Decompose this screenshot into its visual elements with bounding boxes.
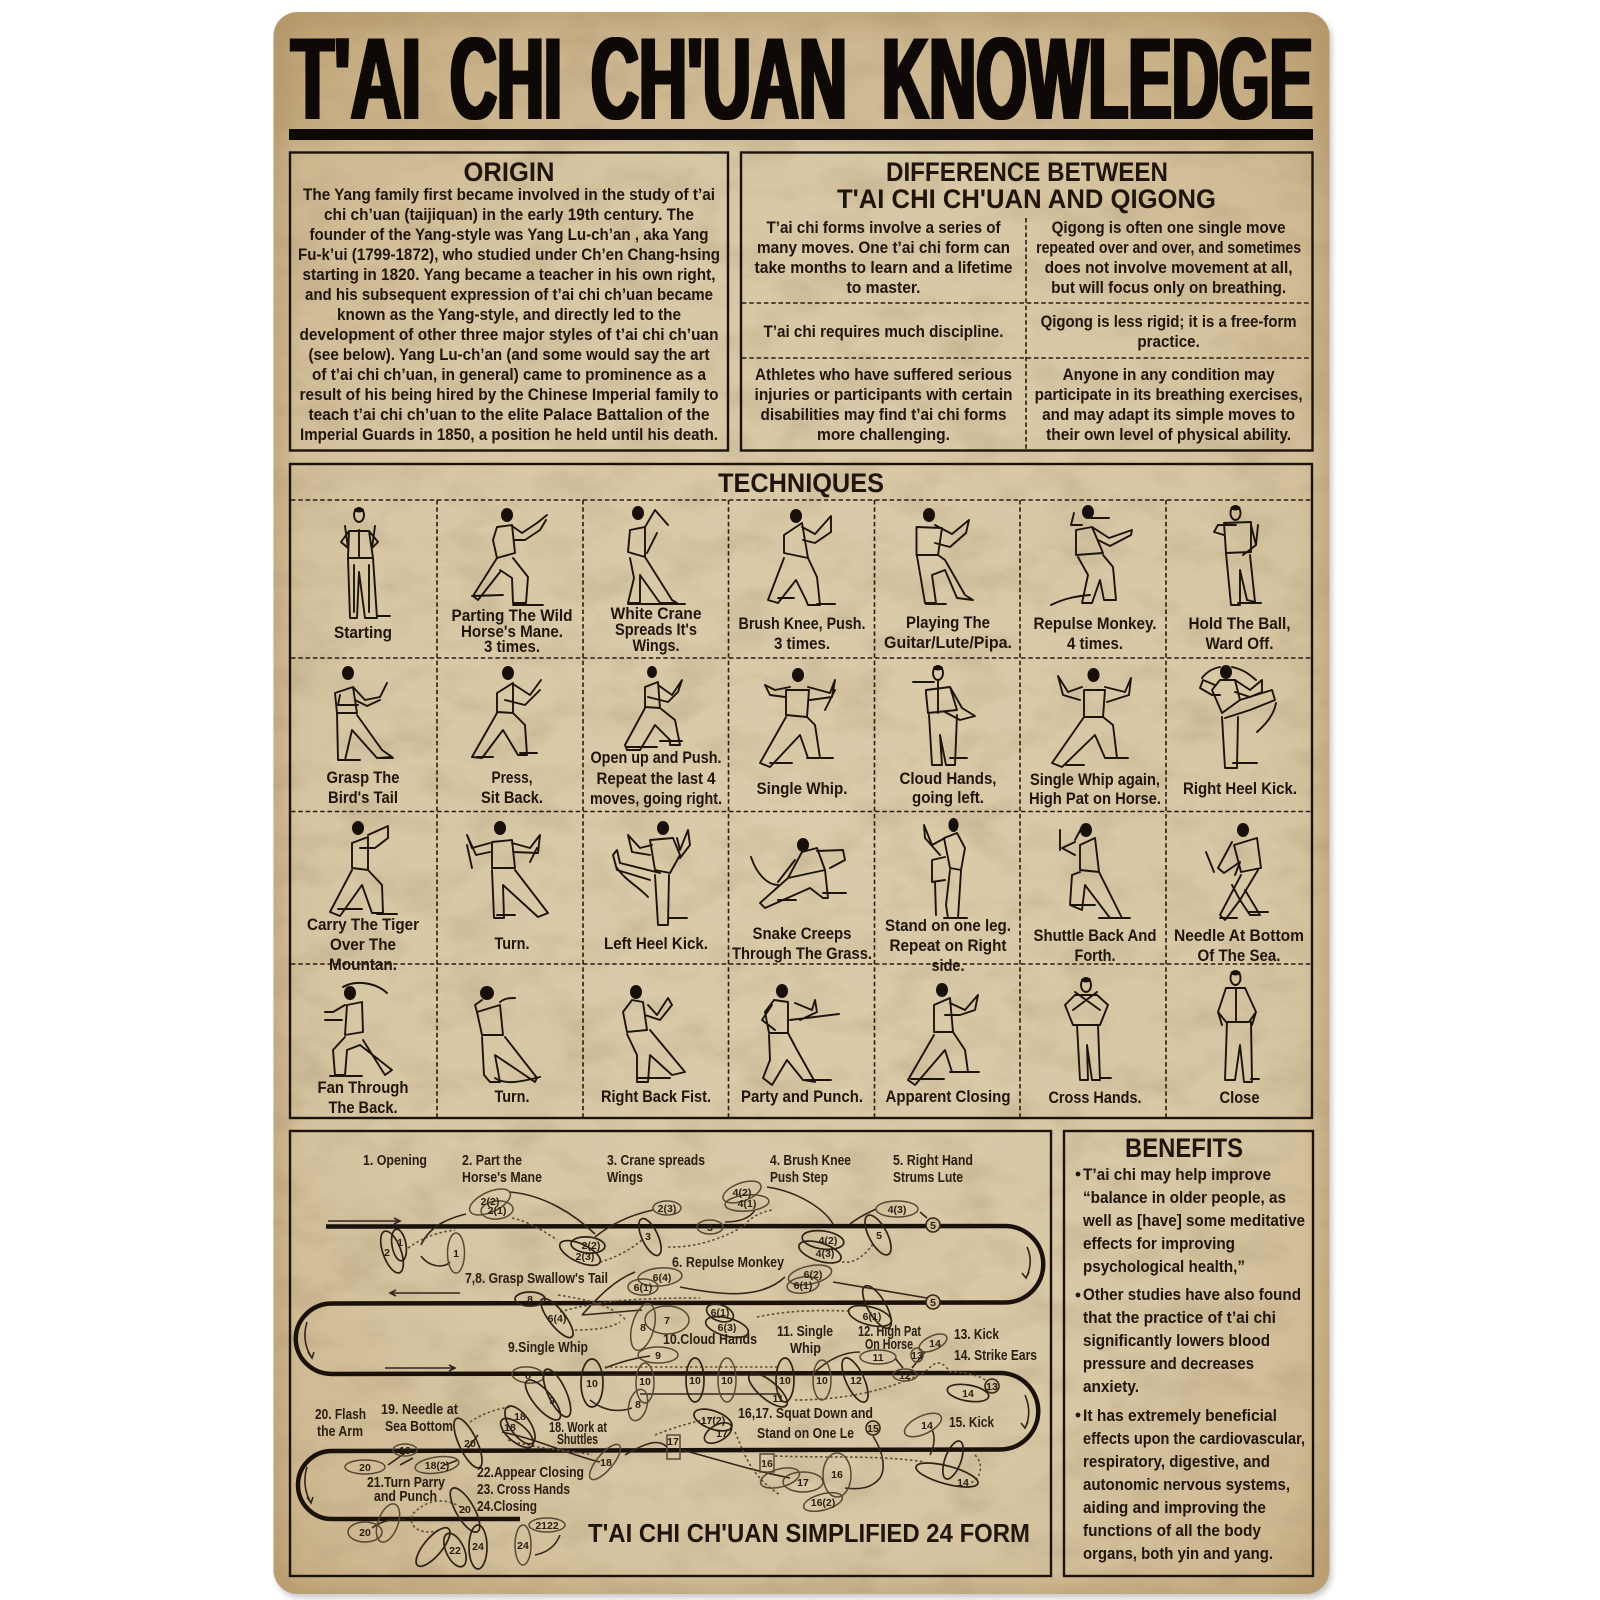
footprint step numbers: 14 (957, 1477, 969, 1489)
difference heading: DIFFERENCE BETWEEN (886, 157, 1168, 187)
footprint step numbers: 3 (645, 1231, 651, 1243)
footprint step numbers: 15 (867, 1423, 879, 1435)
footprint step numbers: 6(1) (711, 1307, 729, 1319)
footprint step numbers: 20 (464, 1438, 476, 1450)
footprint step numbers: 6(1) (863, 1311, 881, 1323)
benefit two: Other studies have also found (1083, 1285, 1301, 1304)
footprint step numbers: 4(2) (733, 1187, 751, 1199)
footwork step labels: 12. High Pat (858, 1324, 921, 1340)
comparison row 2: T’ai chi requires much discipline. (764, 322, 1004, 341)
comparison row 3 (754, 365, 1303, 444)
benefit three: It has extremely beneficial (1083, 1406, 1277, 1425)
technique: close (1218, 970, 1260, 1107)
technique: open up and push: Open up and Push. (590, 748, 722, 767)
footprint step numbers: 6(1) (794, 1280, 812, 1292)
comparison row 1: repeated over and over, and sometimes (1036, 238, 1301, 257)
technique: needle at bottom of the sea: Needle At Bottom (1174, 926, 1304, 945)
technique: hold the ball, ward off: Hold The Ball, (1188, 614, 1290, 633)
title: T'AI (291, 13, 421, 144)
origin body text: founder of the Yang-style was Yang Lu-ch’an , aka Yang (310, 225, 708, 244)
footwork step labels: 4. Brush Knee (770, 1153, 851, 1169)
benefit two: that the practice of t’ai chi (1083, 1308, 1276, 1327)
footprint step numbers: 12 (850, 1375, 862, 1387)
footprint step numbers: 18 (514, 1411, 526, 1423)
footprint step numbers: 3 (707, 1222, 713, 1234)
benefit one: T’ai chi may help improve (1083, 1165, 1271, 1184)
footprint step numbers: 20 (359, 1462, 371, 1474)
technique: cloud hands: going left. (912, 788, 984, 807)
footwork step labels: 15. Kick (949, 1415, 995, 1431)
technique: snake creeps through the grass (732, 838, 872, 963)
footwork step labels: 14. Strike Ears (954, 1348, 1037, 1364)
benefit three: respiratory, digestive, and (1083, 1452, 1270, 1471)
technique: repulse monkey: 4 times. (1067, 634, 1123, 653)
footprint step numbers: 20 (359, 1527, 371, 1539)
panel: origin (290, 152, 728, 450)
origin body text: known as the Yang-style, and directly led to the (337, 305, 681, 324)
footprint step numbers: 24 (517, 1540, 529, 1552)
footprint step numbers: 8 (640, 1322, 646, 1334)
technique: press, sit back: Sit Back. (481, 788, 543, 807)
technique: single whip again, high pat on horse: Single Whip again, (1030, 770, 1160, 789)
footwork step labels: Horse's Mane (462, 1170, 542, 1186)
benefit three: organs, both yin and yang. (1083, 1544, 1273, 1563)
technique: carry the tiger over the mountain (307, 821, 419, 974)
footwork step labels: 23. Cross Hands (477, 1482, 570, 1498)
difference heading: T'AI CHI CH'UAN AND QIGONG (837, 184, 1216, 214)
direction arrows (305, 1218, 1030, 1503)
comparison row 1: Qigong is often one single move (1052, 218, 1286, 237)
panel: difference between tai chi and qigong (741, 152, 1312, 450)
footprint step numbers: 2122 (535, 1520, 559, 1532)
technique: snake creeps through the grass: Snake Creeps (752, 924, 852, 943)
technique: stand on one leg: side. (932, 956, 964, 975)
footwork step labels: 11. Single (777, 1324, 833, 1340)
technique: single whip again, high pat on horse (1029, 668, 1161, 808)
difference heading (837, 157, 1216, 214)
technique: starting (334, 508, 392, 642)
comparison row 3: participate in its breathing exercises, (1035, 385, 1303, 404)
footwork step labels: 18. Work at (549, 1420, 607, 1436)
origin body text: Fu-k’ui (1799-1872), who studied under Ch’en Chang-hsing (298, 245, 720, 264)
footwork step labels: Shuttles (557, 1432, 598, 1448)
benefit three: autonomic nervous systems, (1083, 1475, 1290, 1494)
title rule (289, 129, 1313, 140)
footprint step numbers: 1 (453, 1248, 459, 1260)
benefits heading: BENEFITS (1125, 1133, 1243, 1163)
technique: press, sit back: Press, (492, 768, 532, 787)
footprint step numbers: 2(2) (481, 1196, 499, 1208)
technique: single whip: Single Whip. (756, 779, 848, 798)
footprint step numbers: 9 (549, 1395, 555, 1407)
origin body text (298, 185, 720, 444)
comparison row 3: injuries or participants with certain (754, 385, 1012, 404)
technique: right heel kick (1183, 665, 1297, 798)
technique: fan through the back: The Back. (328, 1098, 398, 1117)
footwork step labels: Whip (790, 1341, 821, 1357)
footprint step numbers: 18 (504, 1422, 516, 1434)
parchment sign background (274, 12, 1330, 1594)
benefit one: effects for improving (1083, 1234, 1235, 1253)
technique: press, sit back (472, 666, 543, 807)
comparison row 3: Athletes who have suffered serious (755, 365, 1012, 384)
origin body text: starting in 1820. Yang became a teacher in his own right, (302, 265, 716, 284)
footwork step labels: Strums Lute (893, 1170, 963, 1186)
technique: stand on one leg: Repeat on Right (890, 936, 1007, 955)
footprint step numbers: 17 (667, 1436, 679, 1448)
technique: starting: Starting (334, 623, 392, 642)
technique: left heel kick (604, 821, 708, 953)
footwork step labels: the Arm (317, 1424, 363, 1440)
footwork step labels: and Punch (374, 1489, 437, 1505)
origin heading: ORIGIN (464, 157, 554, 187)
comparison row 2 (764, 312, 1297, 351)
footwork step labels: 1. Opening (363, 1153, 427, 1169)
footprint step numbers: 6(4) (548, 1313, 566, 1325)
comparison row 1: many moves. One t’ai chi form can (757, 238, 1010, 257)
footprint step numbers: 20 (459, 1504, 471, 1516)
footprint step numbers: 12 (899, 1370, 911, 1382)
footwork step labels: 9.Single Whip (508, 1340, 588, 1356)
footprint step numbers: 14 (921, 1420, 933, 1432)
comparison row 3: their own level of physical ability. (1046, 425, 1291, 444)
technique: white crane spreads its wings: White Crane (610, 604, 702, 623)
technique: close: Close (1220, 1088, 1260, 1107)
technique: right heel kick: Right Heel Kick. (1183, 779, 1297, 798)
footprint step numbers: 11 (772, 1393, 784, 1405)
benefit one: well as [have] some meditative (1082, 1211, 1305, 1230)
technique: parry and punch: Party and Punch. (741, 1087, 863, 1106)
technique: right back fist (601, 985, 711, 1106)
footprint step numbers: 22 (449, 1545, 461, 1557)
technique: turn: Turn. (494, 934, 530, 953)
footprint step numbers: 24 (472, 1541, 484, 1553)
comparison row 3: more challenging. (817, 425, 950, 444)
footprint step numbers: 10 (689, 1375, 701, 1387)
technique: shuttle back and forth: Forth. (1074, 946, 1116, 965)
footprint step numbers: 5 (930, 1220, 936, 1232)
footprint step numbers: 10 (586, 1378, 598, 1390)
title: CH'UAN (591, 13, 847, 144)
footprint step numbers: 2 (384, 1247, 390, 1259)
footwork step labels: On Horse (865, 1337, 913, 1353)
footwork step labels: 24.Closing (477, 1499, 537, 1515)
technique: fan through the back: Fan Through (318, 1078, 408, 1097)
technique: brush knee push (738, 509, 866, 653)
benefit two: anxiety. (1083, 1377, 1139, 1396)
footprint step numbers: 17 (716, 1428, 728, 1440)
footprint step numbers: 2(3) (576, 1251, 594, 1263)
technique: turn (second): Turn. (494, 1087, 530, 1106)
footprint step numbers: 11 (872, 1352, 884, 1364)
footprint step numbers: 2(1) (488, 1205, 506, 1217)
benefit one: psychological health,” (1083, 1257, 1245, 1276)
winding track (296, 1226, 1043, 1519)
footprint step numbers: 17 (797, 1477, 809, 1489)
benefit two: significantly lowers blood (1083, 1331, 1270, 1350)
technique: parting the wild horse's mane: Horse's Mane. (461, 622, 563, 641)
origin body text: and his subsequent expression of t’ai chi ch’uan became (305, 285, 713, 304)
technique: brush knee push: Brush Knee, Push. (738, 614, 866, 633)
comparison row 2: practice. (1137, 332, 1200, 351)
technique: hold the ball, ward off (1188, 506, 1290, 653)
footwork step labels: Wings (607, 1170, 643, 1186)
footprint step numbers: 1 (397, 1237, 403, 1249)
technique: brush knee push: 3 times. (774, 634, 830, 653)
technique: playing the guitar (884, 508, 1012, 652)
technique: right back fist: Right Back Fist. (601, 1087, 711, 1106)
footprint step numbers: 8 (525, 1370, 531, 1382)
footwork step labels: 21.Turn Parry (367, 1475, 445, 1491)
footwork step labels (315, 1153, 1037, 1515)
footwork step labels: 5. Right Hand (893, 1153, 973, 1169)
techniques heading: TECHNIQUES (718, 468, 884, 498)
technique: turn (467, 821, 548, 953)
footwork step labels: 20. Flash (315, 1407, 366, 1423)
technique: cloud hands: Cloud Hands, (900, 769, 996, 788)
footprint step numbers: 19 (399, 1445, 411, 1457)
comparison row 1: but will focus only on breathing. (1051, 278, 1286, 297)
comparison row 3: disabilities may find t’ai chi forms (760, 405, 1006, 424)
technique: stand on one leg (885, 818, 1011, 975)
origin body text: of t’ai chi ch’uan, in general) came to prominence as a (312, 365, 706, 384)
footprint step numbers: 10 (639, 1376, 651, 1388)
technique: needle at bottom of the sea (1174, 823, 1304, 965)
footwork step labels: 13. Kick (954, 1327, 1000, 1343)
comparison row 1 (754, 218, 1301, 297)
footwork step labels: Sea Bottom (385, 1419, 453, 1435)
footprint step numbers: 6(4) (653, 1272, 671, 1284)
comparison row 3: and may adapt its simple moves to (1042, 405, 1295, 424)
benefit two (1076, 1285, 1301, 1396)
benefit two: pressure and decreases (1083, 1354, 1254, 1373)
card shadow (276, 16, 1332, 1598)
technique: needle at bottom of the sea: Of The Sea. (1198, 946, 1280, 965)
footwork step labels: 2. Part the (462, 1153, 522, 1169)
footprint step numbers: 8 (635, 1399, 641, 1411)
footwork step labels: 3. Crane spreads (607, 1153, 705, 1169)
footprint step numbers: 2(3) (658, 1203, 676, 1215)
footwork step labels: 6. Repulse Monkey (672, 1255, 784, 1271)
comparison row 1: does not involve movement at all, (1045, 258, 1293, 277)
origin body text: chi ch’uan (taijiquan) in the early 19th century. The (324, 205, 694, 224)
technique: stand on one leg: Stand on one leg. (885, 916, 1011, 935)
technique: repulse monkey: Repulse Monkey. (1034, 614, 1156, 633)
origin body text: (see below). Yang Lu-ch’an (and some would say the art (308, 345, 710, 364)
benefit one: “balance in older people, as (1083, 1188, 1286, 1207)
footprint step numbers: 10 (779, 1375, 791, 1387)
technique: parry and punch (741, 984, 863, 1106)
footprint step numbers: 13 (911, 1350, 923, 1362)
technique: carry the tiger over the mountain: Mountan. (329, 955, 397, 974)
technique: open up and push: moves, going right. (590, 789, 722, 808)
technique: hold the ball, ward off: Ward Off. (1206, 634, 1274, 653)
footprint step numbers: 18(2) (425, 1460, 449, 1472)
footprint step numbers: 13 (986, 1381, 998, 1393)
technique: apparent closing (886, 983, 1010, 1106)
footwork step labels: 19. Needle at (381, 1402, 458, 1418)
footprint step numbers: 4(3) (816, 1248, 834, 1260)
footwork step labels: Push Step (770, 1170, 828, 1186)
origin body text: development of other three major styles of t’ai chi ch’uan (300, 325, 718, 344)
footprint step numbers: 14 (962, 1388, 974, 1400)
technique: single whip (756, 668, 848, 798)
technique: playing the guitar: Playing The (906, 613, 990, 632)
technique: repulse monkey (1034, 505, 1156, 653)
footprint step numbers: 4(1) (738, 1198, 756, 1210)
footwork step labels: 16,17. Squat Down and (738, 1406, 873, 1422)
title: CHI (450, 13, 562, 144)
technique: single whip again, high pat on horse: High Pat on Horse. (1029, 789, 1161, 808)
origin body text: The Yang family first became involved in the study of t’ai (303, 185, 715, 204)
benefit three (1076, 1406, 1305, 1563)
origin body text: result of his being hired by the Chinese Imperial family to (300, 385, 718, 404)
technique: cross hands (1048, 978, 1142, 1107)
origin body text: Imperial Guards in 1850, a position he held until his death. (300, 425, 718, 444)
comparison row 2: Qigong is less rigid; it is a free-form (1041, 312, 1297, 331)
footprint step numbers: 10 (721, 1375, 733, 1387)
footprint step numbers: 17(2) (701, 1415, 725, 1427)
technique: carry the tiger over the mountain: Carry The Tiger (307, 915, 419, 934)
footwork step labels: 22.Appear Closing (477, 1465, 584, 1481)
footprint step numbers: 16(2) (811, 1497, 835, 1509)
technique: grasp the bird's tail: Bird's Tail (328, 788, 398, 807)
technique: open up and push: Repeat the last 4 (596, 769, 716, 788)
comparison row 1: take months to learn and a lifetime (754, 258, 1012, 277)
comparison row 1: to master. (846, 278, 920, 297)
footwork step labels: 10.Cloud Hands (663, 1332, 757, 1348)
footprint step numbers: 5 (930, 1297, 936, 1309)
technique: white crane spreads its wings: Spreads It's (615, 620, 697, 639)
form caption: T'AI CHI CH'UAN SIMPLIFIED 24 FORM (588, 1518, 1030, 1548)
footprint step numbers: 14 (929, 1338, 941, 1350)
footprint step numbers: 2(2) (582, 1240, 600, 1252)
panel: benefits (1064, 1131, 1313, 1576)
footprint step numbers: 10 (816, 1375, 828, 1387)
technique: apparent closing: Apparent Closing (886, 1087, 1010, 1106)
technique: grasp the bird's tail: Grasp The (326, 768, 400, 787)
footprint step numbers: 6(2) (804, 1269, 822, 1281)
footprint step numbers: 5 (876, 1230, 882, 1242)
footprint step numbers: 6(3) (718, 1322, 736, 1334)
footprint step numbers: 9 (655, 1350, 661, 1362)
technique: shuttle back and forth (1034, 823, 1156, 965)
benefit three: functions of all the body (1083, 1521, 1261, 1540)
footwork step labels: 7,8. Grasp Swallow's Tail (465, 1271, 608, 1287)
footprint step numbers: 18 (600, 1457, 612, 1469)
origin body text: teach t’ai chi ch’uan to the elite Palace Battalion of the (308, 405, 710, 424)
panel: techniques (290, 464, 1312, 1118)
comparison row 1: T’ai chi forms involve a series of (766, 218, 1001, 237)
footprint step numbers: 16 (761, 1458, 773, 1470)
benefit three: effects upon the cardiovascular, (1083, 1429, 1305, 1448)
footwork step labels: Stand on One Le (757, 1426, 854, 1442)
technique: grasp the bird's tail (326, 666, 400, 807)
technique: left heel kick: Left Heel Kick. (604, 934, 708, 953)
technique: open up and push (590, 666, 722, 808)
footprints (345, 1177, 999, 1571)
footprint step numbers: 7 (664, 1315, 670, 1327)
footprint step numbers (359, 1187, 998, 1557)
technique: parting the wild horse's mane: 3 times. (484, 637, 540, 656)
footprint step numbers: 6(1) (634, 1282, 652, 1294)
step connector lines (372, 1187, 988, 1555)
footprint step numbers: 16 (831, 1469, 843, 1481)
technique: snake creeps through the grass: Through The Grass. (732, 944, 872, 963)
comparison row 3: Anyone in any condition may (1063, 365, 1275, 384)
benefit one (1076, 1165, 1305, 1276)
technique: cross hands: Cross Hands. (1048, 1088, 1142, 1107)
benefit three: aiding and improving the (1083, 1498, 1266, 1517)
footprint step numbers: 4(2) (819, 1235, 837, 1247)
technique: white crane spreads its wings: Wings. (632, 636, 680, 655)
technique: carry the tiger over the mountain: Over The (330, 935, 396, 954)
technique: fan through the back (318, 983, 408, 1117)
technique: turn (second) (475, 986, 540, 1106)
footprint step numbers: 4(3) (888, 1204, 906, 1216)
technique: cloud hands (900, 666, 996, 807)
technique: playing the guitar: Guitar/Lute/Pipa. (884, 633, 1012, 652)
technique: shuttle back and forth: Shuttle Back And (1034, 926, 1156, 945)
technique: white crane spreads its wings (610, 506, 702, 655)
footprint step numbers: 8 (527, 1294, 533, 1306)
title (291, 13, 1313, 144)
technique: parting the wild horse's mane (452, 508, 572, 656)
technique: parting the wild horse's mane: Parting The Wild (452, 606, 572, 625)
panel: simplified 24 form footwork diagram (290, 1131, 1051, 1576)
